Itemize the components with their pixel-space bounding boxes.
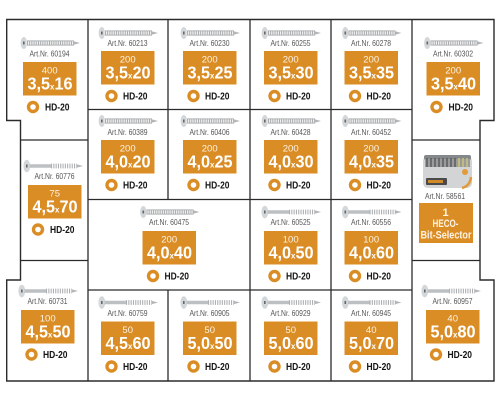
compartment: 60731 4,5x50: 4,5x50 — [26, 322, 71, 342]
compartment: 60929 5,0x60: 50 — [285, 325, 296, 336]
compartment: 60278 3,5x35 — [342, 27, 402, 102]
compartment: 60230 3,5x25: 3,5x25 — [188, 62, 233, 82]
compartment: 60929 5,0x60: 5,0x60 — [268, 333, 314, 353]
compartment: 60957 5,0x80: Art.Nr. 60957 — [432, 297, 473, 306]
compartment: 60556 4,0x60 — [342, 206, 402, 282]
compartment: 60929 5,0x60: HD-20 — [286, 362, 311, 373]
compartment: 60230 3,5x25: HD-20 — [205, 92, 230, 102]
compartment: 60406 4,0x25: HD-20 — [205, 180, 230, 192]
compartment: 60776 4,5x70: 4,5x70 — [32, 196, 78, 216]
compartment: 60452 4,0x35: 200 — [363, 144, 379, 154]
compartment: 60731 4,5x50: 100 — [40, 314, 56, 324]
compartment: 60255 3,5x30: Art.Nr. 60255 — [270, 39, 311, 48]
compartment: 60929 5,0x60 — [261, 296, 321, 373]
compartment: 60945 5,0x70 — [342, 296, 402, 373]
compartment: 60428 4,0x30: Art.Nr. 60428 — [270, 128, 311, 137]
compartment: 60194 3,5x16: Art.Nr. 60194 — [30, 50, 70, 58]
compartment: 60475 4,0x40: 200 — [161, 234, 177, 246]
compartment: 60389 4,0x20: HD-20 — [123, 180, 148, 192]
compartment: 60556 4,0x60: Art.Nr. 60556 — [351, 218, 391, 227]
compartment: 60406 4,0x25: Art.Nr. 60406 — [190, 128, 230, 137]
compartment: 60556 4,0x60: 100 — [363, 234, 379, 246]
compartment: 60905 5,0x50: Art.Nr. 60905 — [190, 309, 230, 318]
compartment: 60475 4,0x40: Art.Nr. 60475 — [149, 218, 189, 227]
compartment: 60759 4,5x60: 4,5x60 — [106, 333, 151, 353]
compartment: 60945 5,0x70: 40 — [366, 325, 376, 336]
compartment: 60759 4,5x60: HD-20 — [123, 362, 148, 373]
compartment: 60230 3,5x25: 200 — [202, 54, 218, 66]
compartment: 60255 3,5x30: 200 — [283, 54, 299, 66]
compartment: 60278 3,5x35: 3,5x35 — [349, 62, 394, 82]
compartment: 60406 4,0x25 — [181, 115, 240, 192]
compartment: 60213 3,5x20: HD-20 — [123, 92, 148, 102]
compartment: 60905 5,0x50: HD-20 — [205, 362, 230, 373]
compartment: 60759 4,5x60: 50 — [122, 325, 133, 336]
compartment: 58561 HECO Bit-Selector — [419, 155, 473, 243]
compartment: 60905 5,0x50: 50 — [204, 325, 215, 336]
compartment: 58561 HECO Bit-Selector: HECO- — [432, 218, 459, 230]
compartment: 60945 5,0x70: HD-20 — [366, 362, 391, 373]
compartment: 60957 5,0x80: 5,0x80 — [430, 322, 476, 342]
compartment: 60525 4,0x50: HD-20 — [286, 272, 311, 282]
compartment: 60475 4,0x40: 4,0x40 — [147, 242, 192, 262]
compartment: 60905 5,0x50 — [180, 296, 240, 373]
compartment: 60731 4,5x50: HD-20 — [43, 350, 68, 361]
compartment: 60776 4,5x70: Art.Nr. 60776 — [34, 172, 75, 181]
compartment: 60957 5,0x80 — [421, 285, 481, 361]
compartment: 60278 3,5x35: Art.Nr. 60278 — [351, 39, 391, 48]
compartment: 60194 3,5x16 — [21, 37, 80, 114]
compartment: 60230 3,5x25: Art.Nr. 60230 — [190, 39, 230, 48]
compartment: 60302 3,5x40: 3,5x40 — [431, 74, 476, 94]
compartment: 60776 4,5x70: HD-20 — [50, 225, 75, 236]
compartment: 60213 3,5x20: 200 — [120, 54, 136, 66]
compartment: 60957 5,0x80: HD-20 — [448, 350, 472, 361]
compartment: 60302 3,5x40: Art.Nr. 60302 — [433, 50, 473, 58]
compartment: 60452 4,0x35 — [342, 115, 402, 192]
compartment: 60452 4,0x35: HD-20 — [366, 180, 391, 192]
compartment: 60255 3,5x30: HD-20 — [286, 92, 311, 102]
compartment: 60389 4,0x20: Art.Nr. 60389 — [108, 128, 148, 137]
compartment: 60452 4,0x35: 4,0x35 — [349, 152, 394, 172]
compartment: 60428 4,0x30 — [262, 115, 321, 192]
compartment: 60957 5,0x80: 40 — [447, 314, 458, 324]
compartment: 60213 3,5x20: Art.Nr. 60213 — [108, 39, 148, 48]
compartment: 60731 4,5x50 — [18, 285, 78, 361]
compartment: 58561 HECO Bit-Selector: 1 — [442, 207, 449, 219]
compartment: 60213 3,5x20 — [99, 27, 158, 102]
compartment: 60213 3,5x20: 3,5x20 — [106, 62, 151, 82]
compartment: 60389 4,0x20: 4,0x20 — [106, 152, 151, 172]
compartment: 60230 3,5x25 — [181, 27, 240, 102]
compartment: 60389 4,0x20 — [99, 115, 158, 192]
compartment: 60255 3,5x30: 3,5x30 — [268, 62, 314, 82]
compartment: 60556 4,0x60: HD-20 — [366, 272, 391, 282]
compartment: 60452 4,0x35: Art.Nr. 60452 — [351, 128, 391, 137]
icon: bit selector case — [423, 155, 472, 188]
compartment: 60302 3,5x40: HD-20 — [448, 102, 473, 114]
compartment: 60929 5,0x60: Art.Nr. 60929 — [270, 309, 311, 318]
compartment: 60406 4,0x25: 200 — [202, 144, 218, 154]
compartment: 60302 3,5x40: 200 — [445, 66, 461, 76]
compartment: 60759 4,5x60 — [98, 296, 158, 373]
compartment: 60525 4,0x50 — [261, 206, 321, 282]
compartment: 60759 4,5x60: Art.Nr. 60759 — [108, 309, 148, 318]
compartment: 60475 4,0x40: HD-20 — [164, 272, 189, 282]
compartment: 60475 4,0x40 — [140, 206, 200, 282]
compartment: 60525 4,0x50: Art.Nr. 60525 — [270, 218, 311, 227]
compartment: 60278 3,5x35: 200 — [363, 54, 379, 66]
compartment: 58561 HECO Bit-Selector: Bit-Selector — [420, 230, 472, 242]
compartment: 58561 HECO Bit-Selector: Art.Nr. 58561 — [425, 192, 465, 201]
compartment: 60428 4,0x30: 4,0x30 — [268, 152, 314, 172]
compartment: 60194 3,5x16: 3,5x16 — [28, 74, 73, 94]
compartment: 60525 4,0x50: 100 — [283, 234, 299, 246]
compartment: 60194 3,5x16: HD-20 — [45, 102, 70, 114]
compartment: 60731 4,5x50: Art.Nr. 60731 — [28, 297, 68, 306]
compartment: 60428 4,0x30: HD-20 — [286, 180, 311, 192]
compartment: 60389 4,0x20: 200 — [120, 144, 136, 154]
compartment: 60945 5,0x70: Art.Nr. 60945 — [351, 309, 391, 318]
compartment: 60194 3,5x16: 400 — [42, 66, 58, 76]
compartment: 60776 4,5x70: 75 — [49, 188, 60, 200]
compartment: 60776 4,5x70 — [23, 160, 83, 236]
compartment: 60905 5,0x50: 5,0x50 — [188, 333, 233, 353]
compartment: 60945 5,0x70: 5,0x70 — [349, 333, 394, 353]
compartment: 60525 4,0x50: 4,0x50 — [268, 242, 314, 262]
compartment: 60556 4,0x60: 4,0x60 — [349, 242, 394, 262]
compartment: 60302 3,5x40 — [424, 37, 484, 114]
compartment: 60255 3,5x30 — [262, 27, 321, 102]
compartment: 60428 4,0x30: 200 — [283, 144, 299, 154]
compartment: 60406 4,0x25: 4,0x25 — [188, 152, 233, 172]
compartment: 60278 3,5x35: HD-20 — [366, 92, 391, 102]
